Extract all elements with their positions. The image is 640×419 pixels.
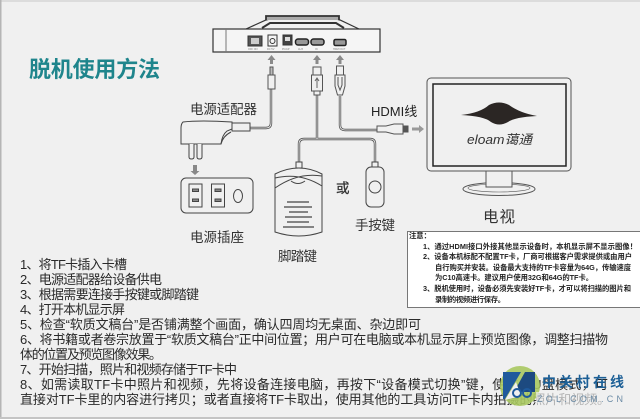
icon: power adapter [181, 121, 250, 159]
instruction list: 3、根据需要连接手按键或脚踏键 [20, 287, 199, 302]
instruction list: 2、电源适配器给设备供电 [20, 272, 162, 287]
panel: notes: 2、设备本机标配不配置TF卡，厂商可根据客户需求提供或由用户 [423, 252, 632, 261]
cable: HDMI [335, 66, 408, 134]
cable: power adapter [250, 67, 275, 128]
port: USB A 2 [311, 39, 324, 45]
arrows up to ports [268, 55, 344, 64]
foot pedal label: 脚踏键 [278, 249, 318, 264]
icon: TV [427, 78, 571, 196]
HDMI label: HDMI线 [371, 104, 417, 119]
icon: power socket [181, 178, 253, 213]
arrow down to socket [190, 165, 200, 175]
instruction list [20, 257, 610, 408]
text: PC/AP [282, 48, 290, 51]
instruction list: 1、将TF卡插入卡槽 [20, 257, 127, 272]
panel: notes: 3、脱机使用时，设备必须先安装好TF卡，才可以将扫描的图片和 [423, 284, 631, 293]
device rear panel [213, 16, 380, 52]
cable: USB plug with branch [299, 67, 375, 164]
icon: foot pedal [275, 162, 322, 236]
panel: notes: 为C10高速卡。建议用户使用32G和64G的TF卡。 [435, 273, 593, 282]
or label: 或 [336, 181, 350, 196]
icon: hand button [366, 162, 384, 207]
instruction list: 5、检查“软质文稿台”是否铺满整个画面，确认四周均无桌面、杂边即可 [20, 317, 421, 332]
panel: notes: 注意： [409, 231, 431, 240]
text: AUX [298, 48, 303, 51]
hand button label: 手按键 [355, 218, 396, 233]
text: OFF ON [248, 48, 258, 51]
text: HDMI OUT [333, 48, 346, 51]
port: power switch [248, 36, 262, 46]
TV label: 电视 [483, 208, 515, 226]
instruction list: 7、开始扫描，照片和视频存储于TF卡中 [20, 362, 237, 377]
instruction list: 直接对TF卡里的内容进行拷贝；或者直接将TF卡取出，使用其他的工具访问TF卡内拍摄的照片和视频。 [20, 392, 610, 408]
port: HDMI [334, 40, 346, 46]
title: 脱机使用方法 [29, 57, 160, 82]
instruction list: 4、打开本机显示屏 [20, 302, 125, 317]
panel: notes [408, 231, 640, 308]
watermark: ZOL logo [500, 366, 540, 406]
panel: notes: 1、通过HDMI接口外接其他显示设备时，本机显示屏不显示图像！ [423, 242, 637, 251]
port: DC [268, 35, 277, 46]
arrow to TV [412, 125, 424, 133]
panel: notes: 自行购买并安装。设备最大支持的TF卡容量为64G，传输速度 [435, 263, 632, 272]
watermark: site name: 中关村在线 [542, 374, 624, 390]
power adapter label: 电源适配器 [190, 102, 258, 117]
port: USB A 1 [296, 39, 308, 45]
watermark: site name [536, 374, 628, 406]
socket label: 电源插座 [190, 230, 244, 245]
text: DC 5V [267, 48, 275, 51]
text: IN [315, 48, 318, 51]
icon: TV: eloam蔼通 [467, 132, 534, 147]
watermark: site name: ZOL.COM.CN [537, 394, 623, 404]
port: USB-B [283, 35, 292, 45]
instruction list: 6、将书籍或者卷宗放置于“软质文稿台”正中间位置；用户可在电脑或本机显示屏上预览图像，调整扫描物 [20, 332, 608, 348]
instruction list: 体的位置及预览图像效果。 [20, 347, 162, 362]
instruction list: 8、如需读取TF卡中照片和视频，先将设备连接电脑，再按下“设备模式切换”键，使进入U盘模式，可 [20, 377, 608, 392]
panel: notes: 录制的视频进行保存。 [435, 295, 505, 304]
